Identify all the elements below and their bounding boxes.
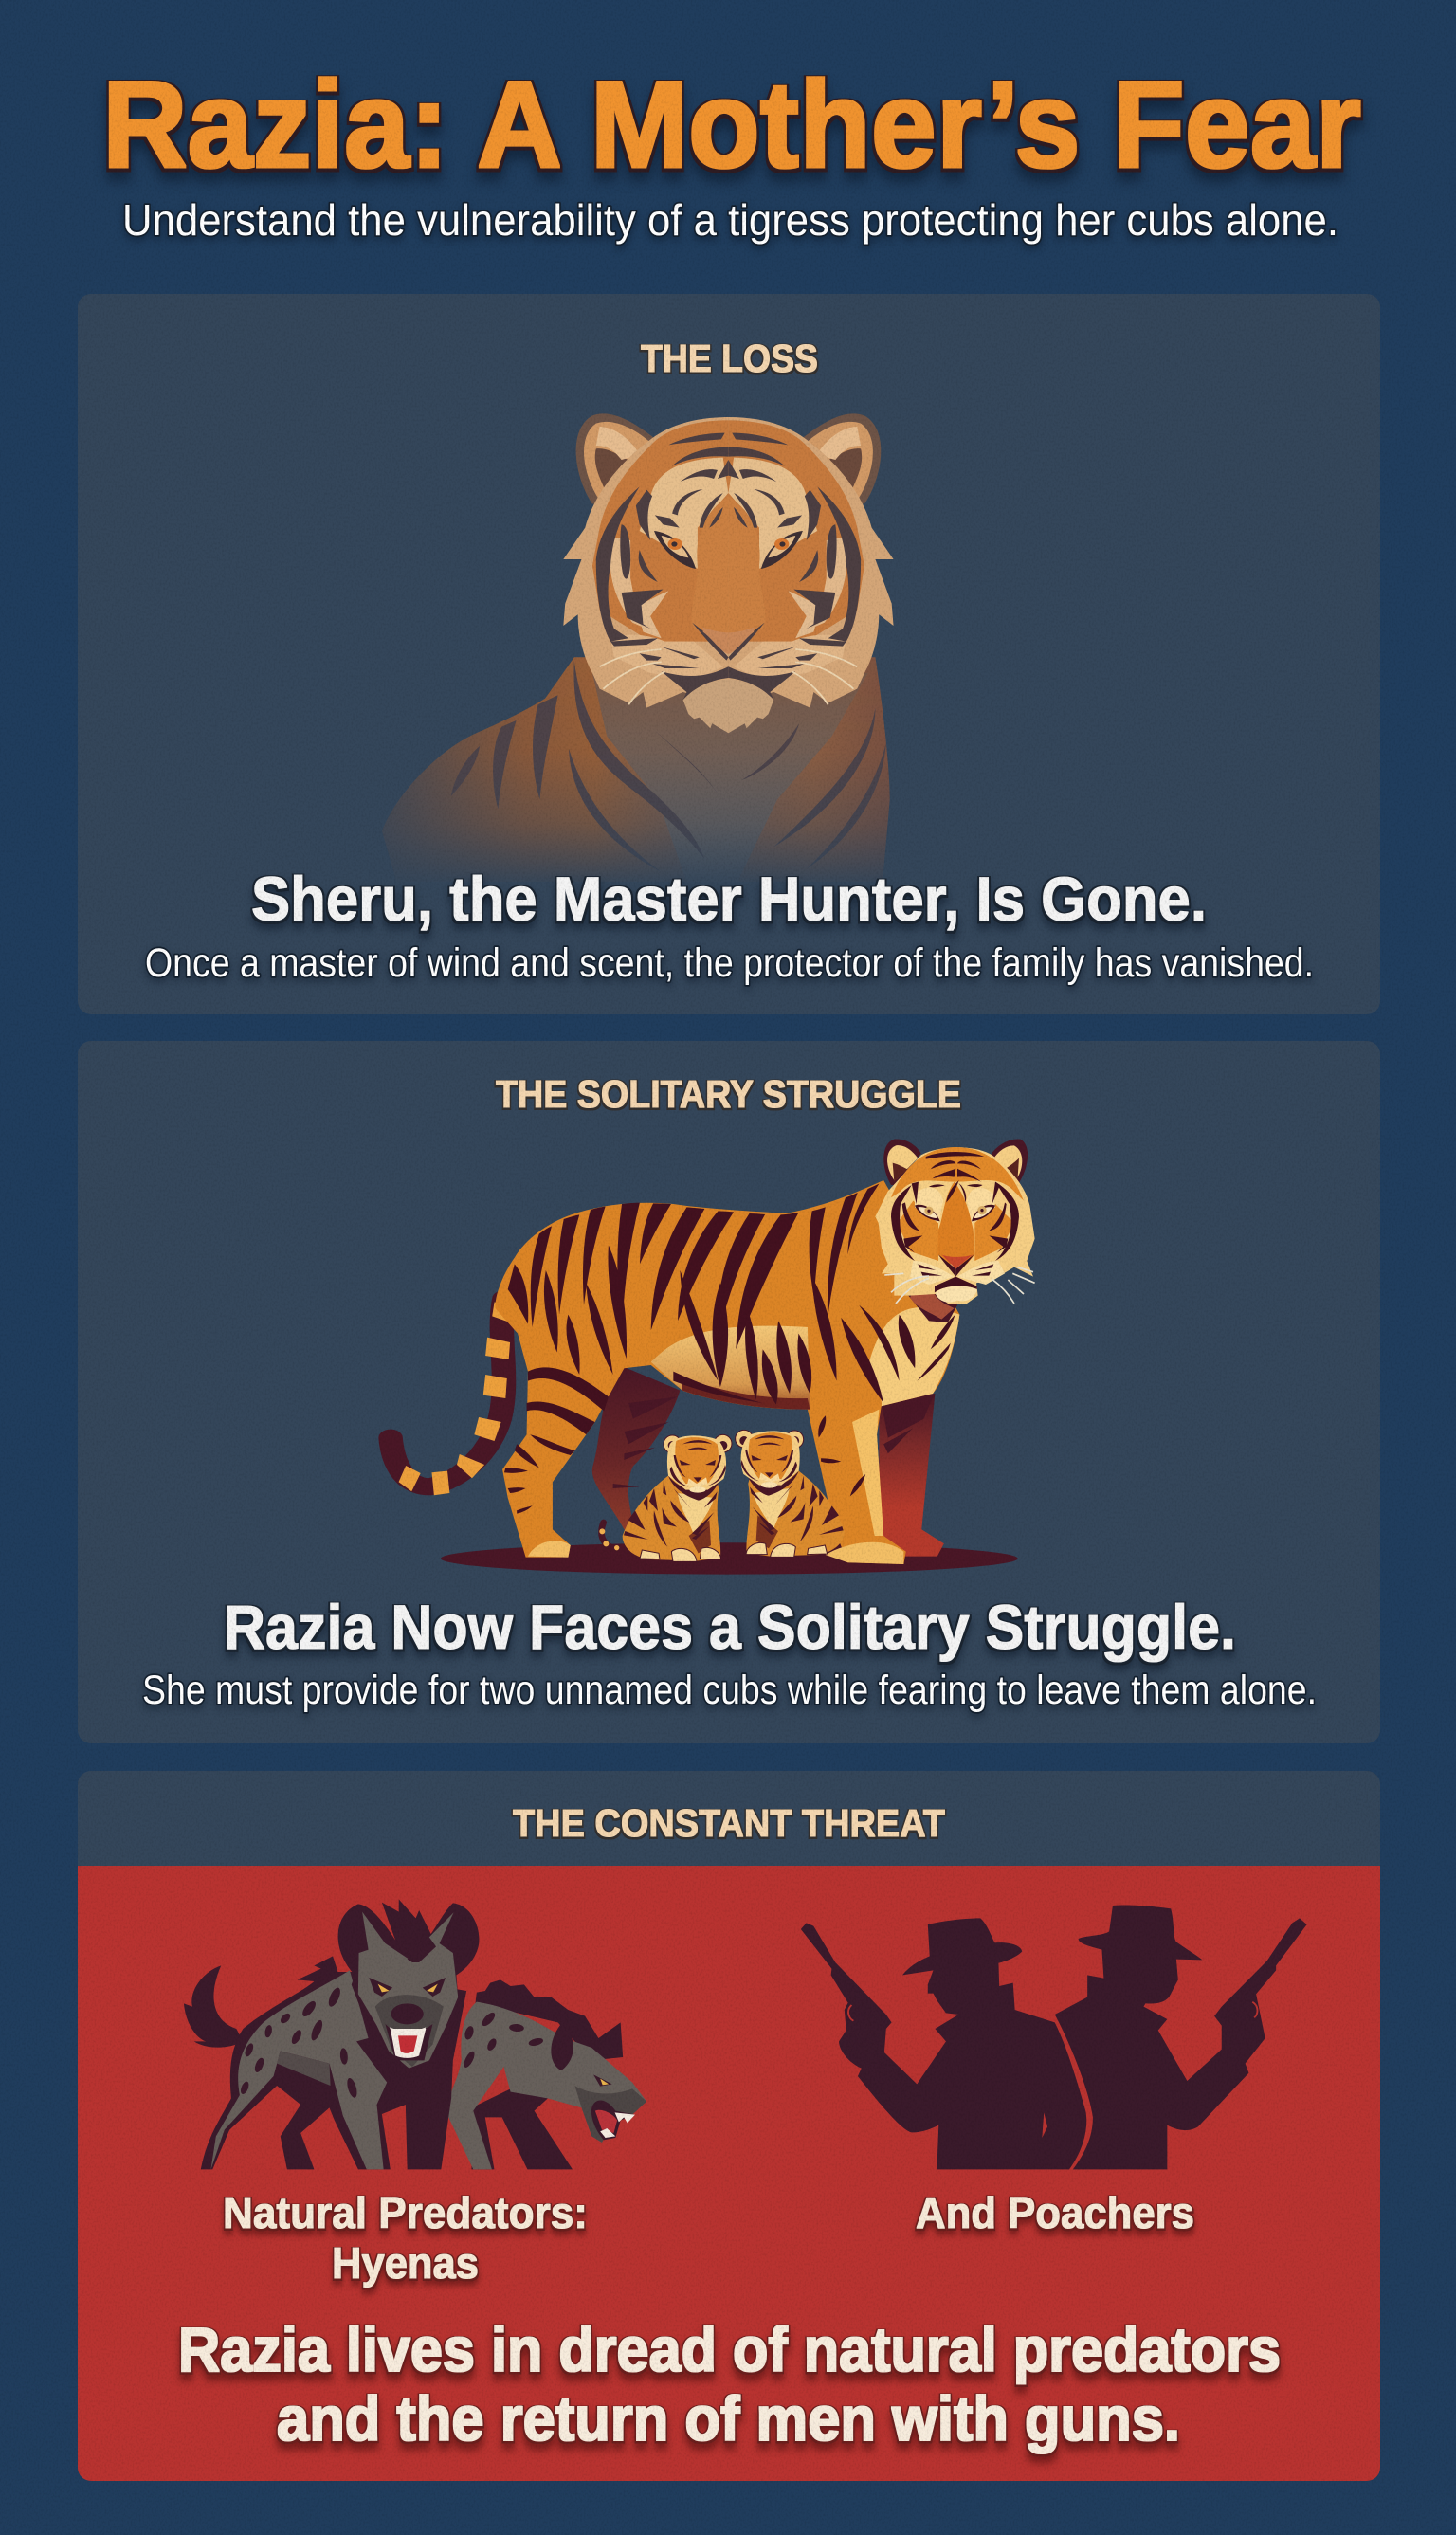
caption: natural predators — [223, 2188, 588, 2288]
tigress stripes — [504, 1184, 956, 1514]
headline: Sheru: Sheru, the Master Hunter, Is Gone. — [251, 864, 1207, 934]
caption: poachers: And Poachers — [916, 2188, 1194, 2237]
headline: Razia: Razia Now Faces a Solitary Struggle. — [224, 1592, 1236, 1662]
hyena back — [446, 1979, 646, 2169]
cub right — [736, 1430, 845, 1557]
icon: poachers silhouette — [801, 1906, 1307, 2169]
illustration: Razia with two cubs — [391, 1139, 1035, 1575]
body text: the loss: Once a master of wind and scent, the protector of the family has vanished. — [145, 940, 1314, 986]
tigress body — [391, 1180, 1018, 1575]
cub left — [623, 1434, 732, 1561]
red threat block — [78, 1866, 1380, 2481]
section label: solitary struggle: THE SOLITARY STRUGGLE — [496, 1072, 961, 1116]
panel: the constant threat — [78, 1771, 1380, 2481]
title: Razia: A Mother’s Fear — [102, 55, 1361, 193]
conclusion statement: Razia lives in dread of natural predators — [178, 2314, 1281, 2384]
panel: the loss — [78, 294, 1380, 1014]
tigress head — [875, 1139, 1035, 1322]
icon: hyenas — [184, 1899, 646, 2169]
body text: solitary struggle: She must provide for two unnamed cubs while fearing to leave them alone. — [142, 1668, 1317, 1713]
hyena front — [184, 1899, 479, 2169]
poacher right — [1055, 1906, 1307, 2169]
caption: natural predators: Natural Predators: — [223, 2188, 588, 2237]
cubs — [599, 1430, 845, 1561]
section label: the loss: THE LOSS — [641, 337, 818, 380]
section label: constant threat: THE CONSTANT THREAT — [513, 1801, 945, 1845]
caption: natural predators: Hyenas — [332, 2238, 479, 2288]
conclusion statement: and the return of men with guns. — [277, 2383, 1180, 2453]
panel: the solitary struggle — [78, 1041, 1380, 1743]
cub left tail — [599, 1523, 621, 1550]
subtitle: Understand the vulnerability of a tigress protecting her cubs alone. — [122, 195, 1338, 245]
illustration: Sheru tiger portrait — [382, 413, 894, 882]
conclusion statement — [178, 2314, 1281, 2453]
poacher left — [801, 1918, 1086, 2169]
